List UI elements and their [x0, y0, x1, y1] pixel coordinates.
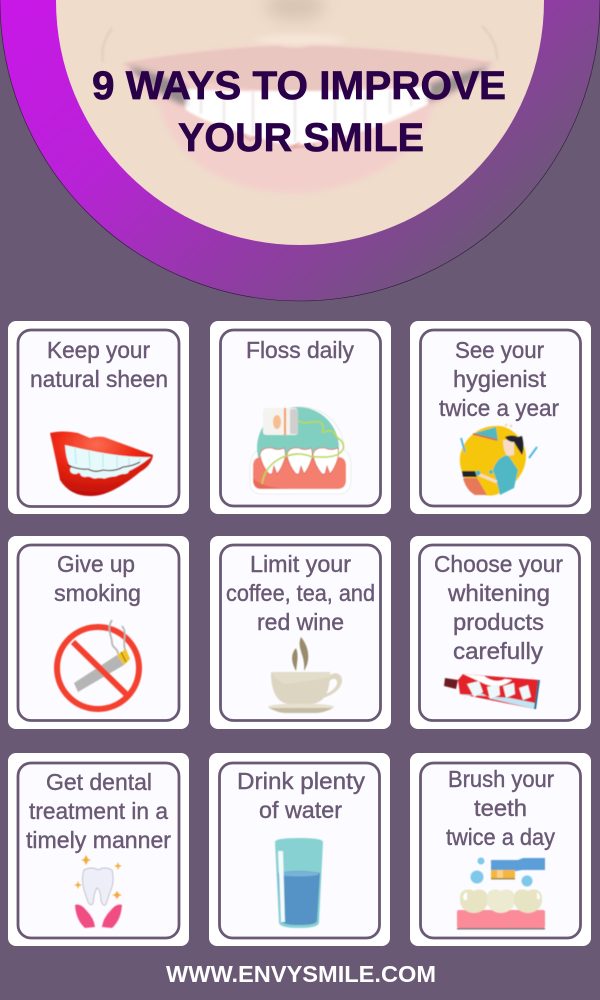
icon: toothbrush and teeth: [457, 858, 545, 930]
panel: limit coffee, tea and red wine: [210, 536, 391, 729]
heading: limit coffee, tea and red wine: Limit your: [250, 551, 351, 577]
heading: keep your natural sheen: [30, 337, 168, 392]
icon: dental floss: [250, 407, 351, 494]
lips: [126, 66, 470, 192]
heading: see your hygienist twice a year: hygienist: [453, 366, 547, 392]
heading: give up smoking: [54, 551, 141, 606]
title: [92, 64, 506, 160]
panel: drink plenty of water: [209, 753, 390, 946]
heading: brush your teeth twice a day: Brush your: [448, 766, 554, 792]
heading: get dental treatment in a timely manner: timely manner: [26, 827, 171, 853]
heading: drink plenty of water: Drink plenty: [237, 768, 366, 794]
icon: red lips: [50, 432, 153, 496]
gradient ring: [0, 0, 600, 301]
icon: steaming coffee cup: [268, 637, 342, 713]
heading: get dental treatment in a timely manner: [26, 769, 171, 853]
title: 9 WAYS TO IMPROVE: [92, 64, 506, 108]
icon: sparkling tooth and hands: [74, 855, 122, 928]
heading: get dental treatment in a timely manner: Get dental: [46, 769, 152, 795]
icon: hygienist scene: [460, 424, 537, 496]
heading: choose your whitening products carefully: [434, 551, 563, 664]
heading: brush your teeth twice a day: twice a day: [446, 824, 555, 850]
panel: see your hygienist twice a year: [410, 321, 591, 514]
smile photo: [50, 0, 550, 250]
footer: website url: WWW.ENVYSMILE.COM: [166, 961, 436, 987]
heading: keep your natural sheen: natural sheen: [30, 366, 168, 392]
heading: choose your whitening products carefully: Choose your: [434, 551, 563, 577]
title: YOUR SMILE: [178, 116, 424, 160]
heading: give up smoking: Give up: [57, 551, 135, 577]
heading: brush your teeth twice a day: [446, 766, 555, 850]
header: gradient ring with smile photo: [0, 0, 600, 301]
heading: choose your whitening products carefully: carefully: [453, 638, 544, 664]
heading: drink plenty of water: of water: [259, 797, 342, 823]
icon: toothpaste tube: [444, 674, 539, 709]
heading: limit coffee, tea and red wine: red wine: [257, 609, 344, 635]
panel: choose your whitening products carefully: [410, 536, 591, 729]
panel: give up smoking: [8, 536, 189, 729]
panel: brush your teeth twice a day: [410, 753, 591, 946]
heading: drink plenty of water: [237, 768, 366, 823]
heading: floss daily: Floss daily: [246, 337, 354, 363]
heading: limit coffee, tea and red wine: [226, 551, 375, 635]
heading: limit coffee, tea and red wine: coffee, tea, and: [226, 580, 375, 606]
heading: see your hygienist twice a year: See your: [455, 337, 544, 363]
icon: glass of water: [275, 838, 323, 928]
heading: get dental treatment in a timely manner: treatment in a: [29, 798, 168, 824]
heading: choose your whitening products carefully: products: [453, 609, 544, 635]
teeth: [180, 86, 432, 145]
icon: no smoking sign: [57, 620, 139, 709]
heading: choose your whitening products carefully: whitening: [447, 580, 550, 606]
heading: give up smoking: smoking: [54, 580, 141, 606]
heading: keep your natural sheen: Keep your: [47, 337, 150, 363]
panel: keep your natural sheen: [8, 321, 189, 514]
heading: see your hygienist twice a year: twice a year: [439, 395, 559, 421]
heading: brush your teeth twice a day: teeth: [474, 795, 527, 821]
panel: get dental treatment in a timely manner: [8, 753, 189, 946]
heading: see your hygienist twice a year: [439, 337, 559, 421]
panel: floss daily: [210, 321, 391, 514]
